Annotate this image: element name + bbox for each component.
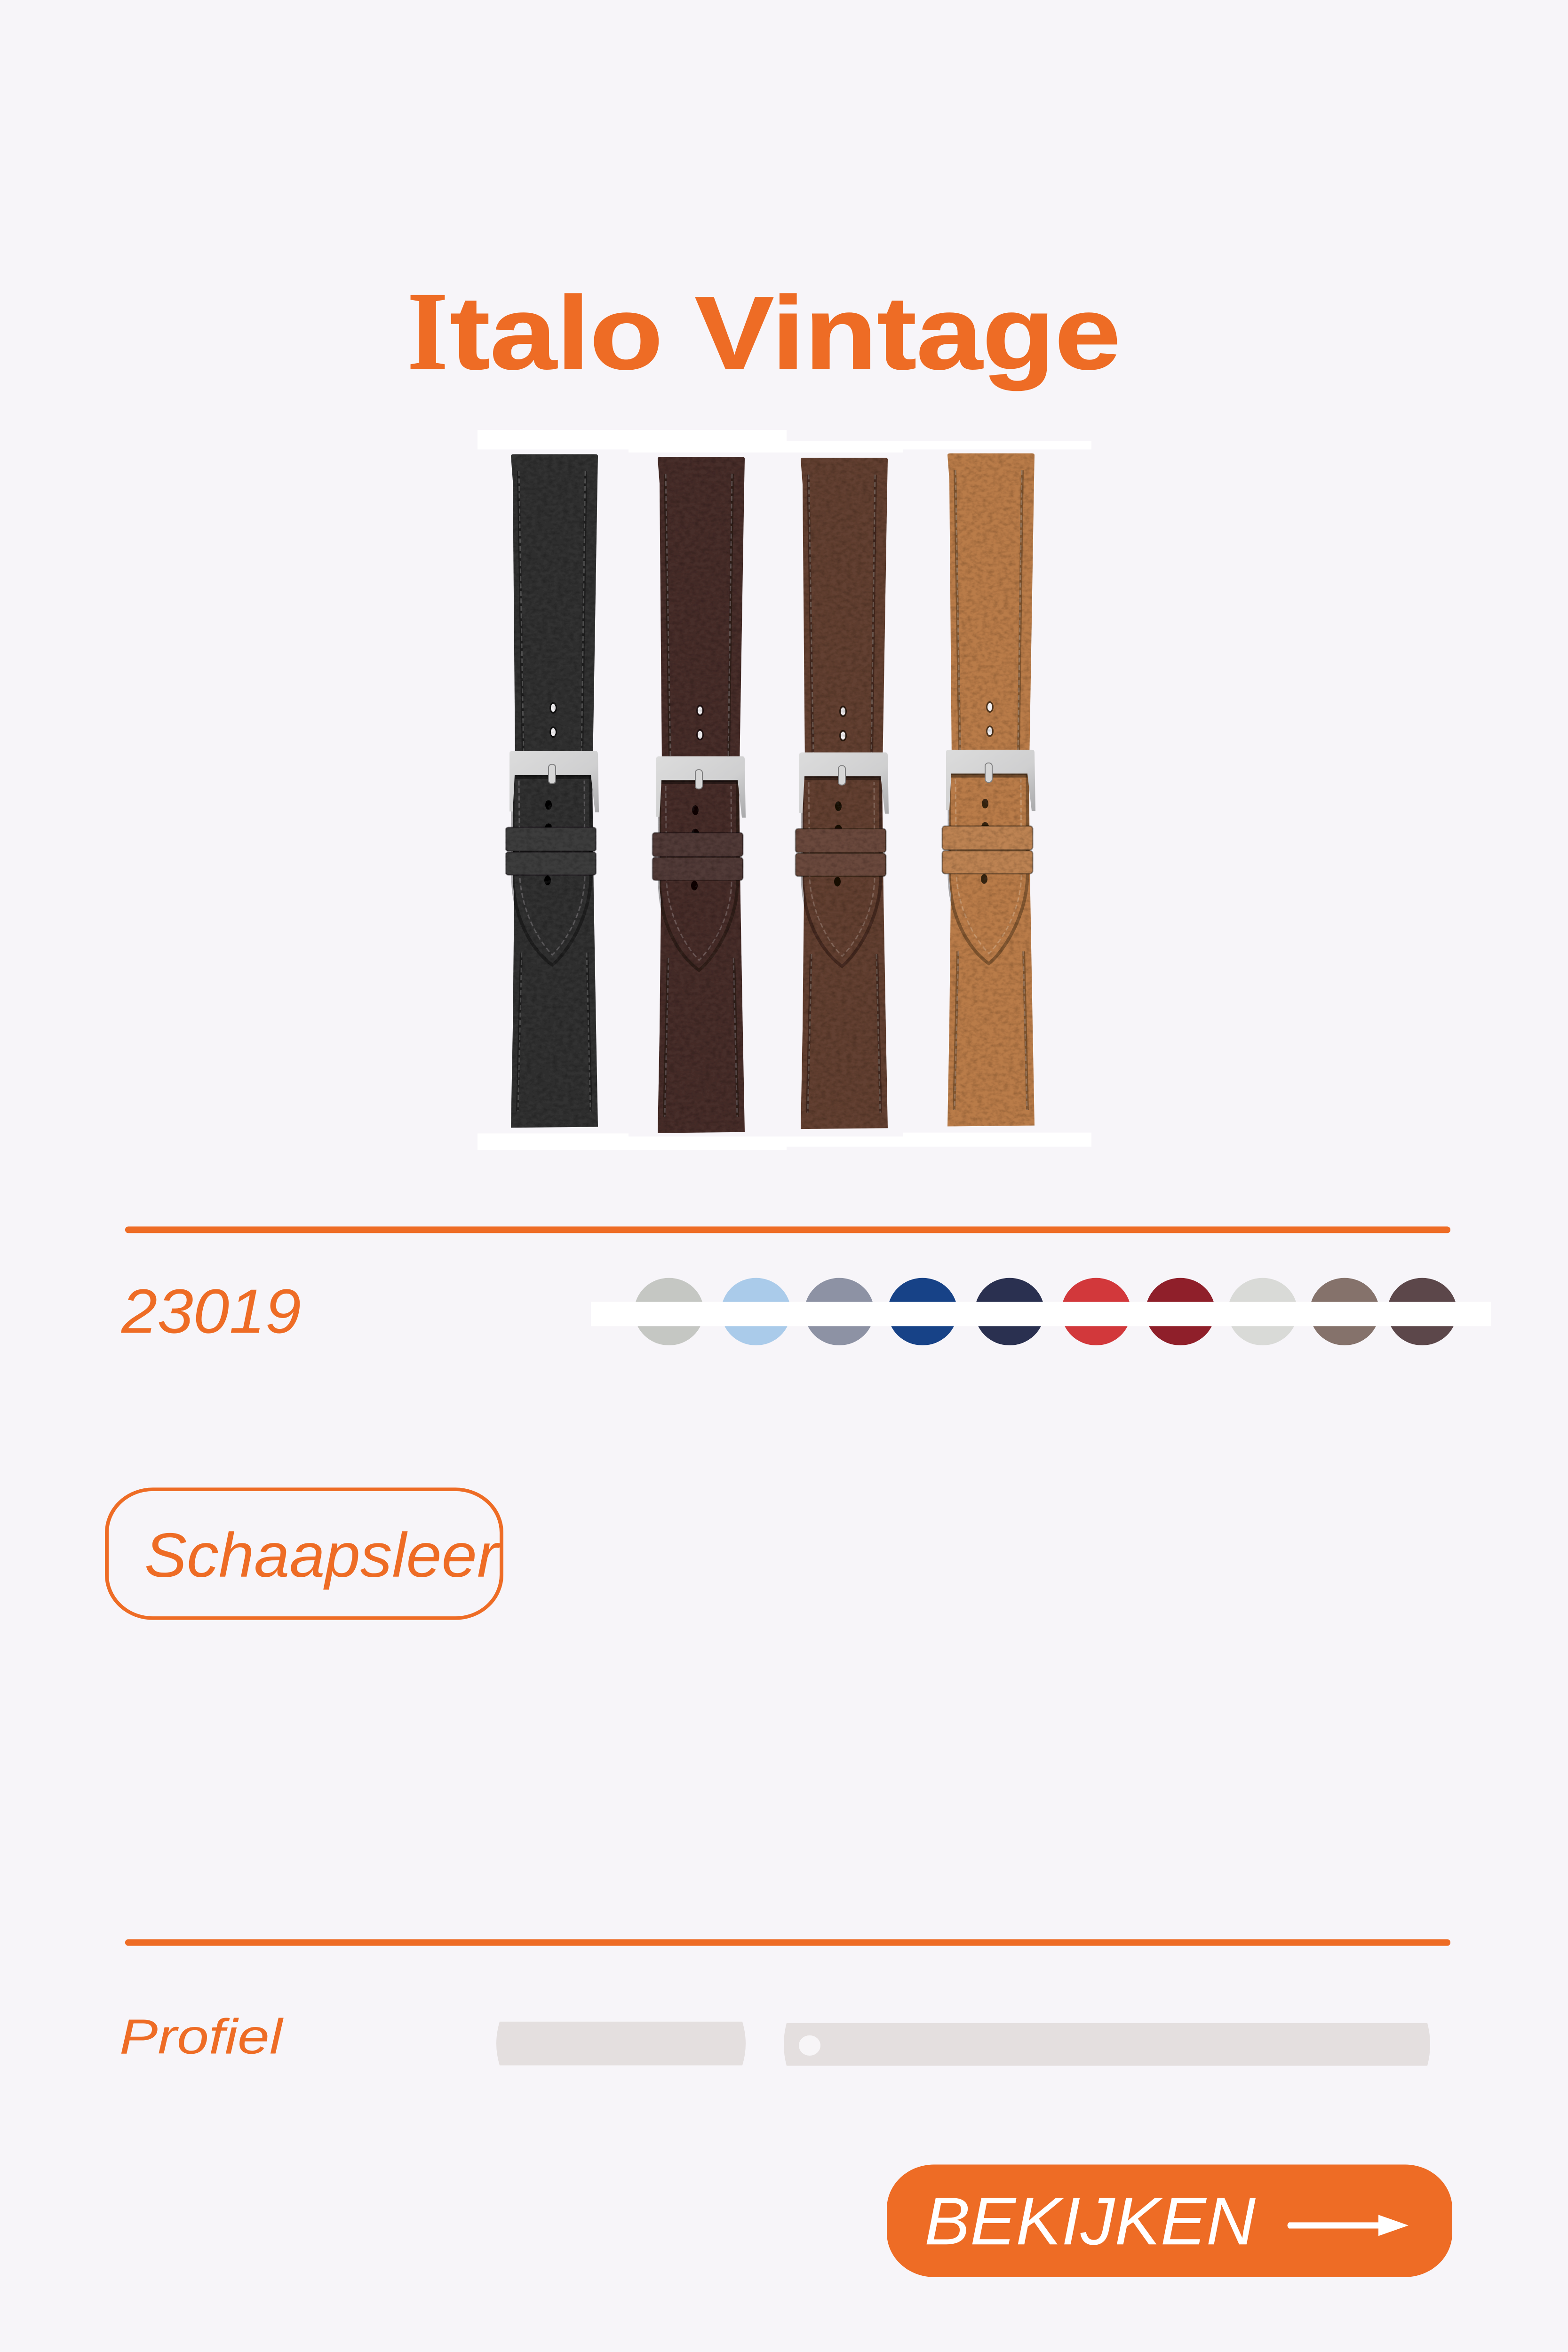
image backdrop: white patches behind straps	[478, 430, 1091, 1150]
title: talo	[450, 276, 663, 391]
strap: black	[506, 454, 599, 1128]
profile shape: right bar with dot	[784, 2023, 1430, 2066]
top divider line	[125, 1226, 1450, 1233]
material pill	[107, 1489, 501, 1618]
button	[887, 2165, 1452, 2277]
profile shape: left bar	[496, 2022, 746, 2066]
button: BEKIJKEN	[924, 2184, 1256, 2259]
strap: tan	[942, 453, 1035, 1127]
title: I	[407, 270, 448, 393]
material pill: Schaapsleer	[144, 1520, 501, 1590]
white band over swatches	[591, 1302, 1491, 1326]
title: Vintage	[695, 276, 1121, 391]
bottom divider line	[125, 1939, 1450, 1946]
profile label: Profiel	[119, 2009, 284, 2064]
arrow icon	[1287, 2215, 1409, 2236]
strap: brown	[796, 458, 889, 1129]
title	[407, 270, 1121, 393]
strap: dark brown	[653, 457, 746, 1133]
article number: 23019	[121, 1276, 301, 1346]
colour swatches	[634, 1278, 1457, 1345]
